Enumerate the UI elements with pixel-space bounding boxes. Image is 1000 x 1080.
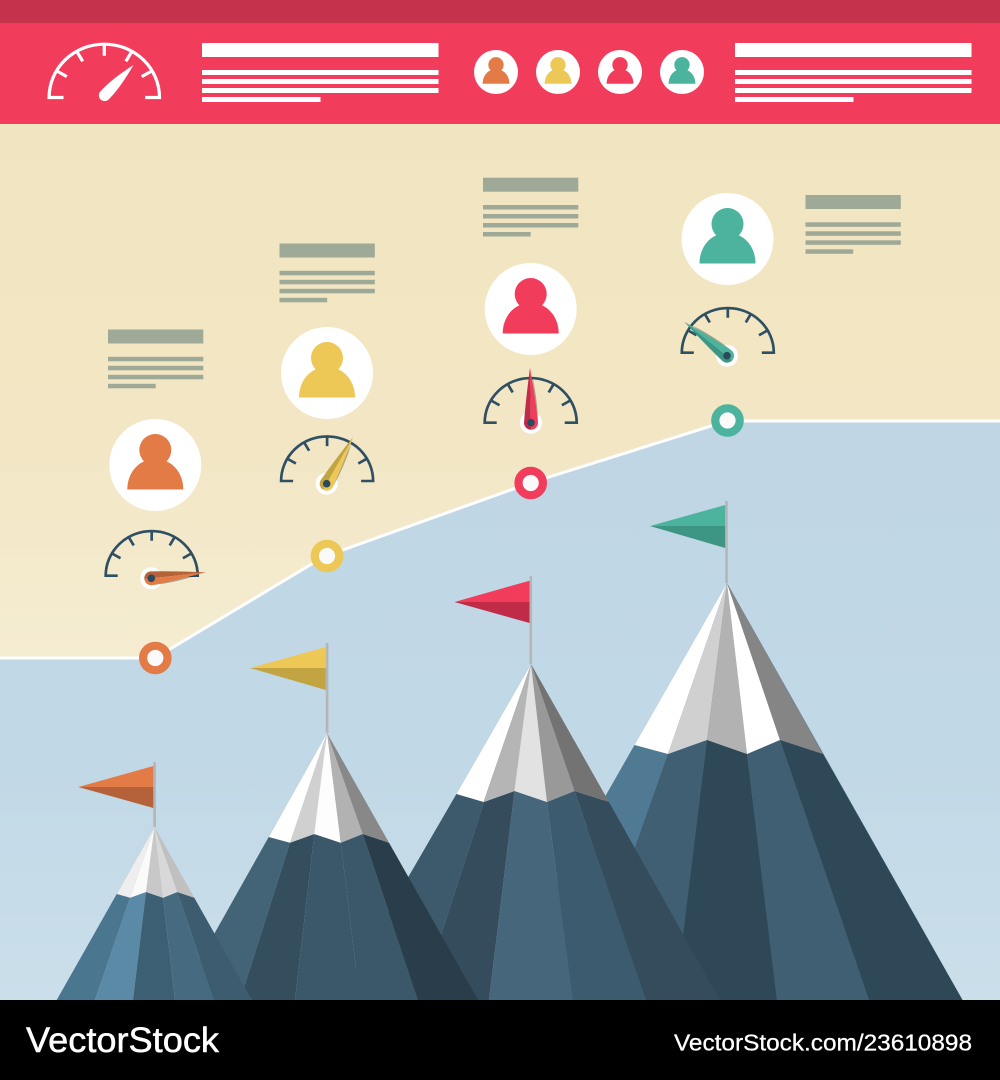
- marker: teal ring: [715, 408, 740, 433]
- marker: red ring: [518, 471, 543, 495]
- icon: small teal person: [660, 50, 704, 94]
- icon: small red person: [598, 50, 642, 94]
- marker: orange ring: [143, 646, 168, 670]
- text block: step 1: [108, 330, 203, 388]
- icon: small yellow person: [536, 50, 580, 94]
- footer bar: [0, 1000, 1000, 1080]
- footer url text: VectorStock.com/23610898: [674, 1030, 972, 1056]
- text block: step 2: [280, 244, 375, 302]
- mountain 4 with teal flag: [489, 501, 962, 1000]
- header text block: right: [735, 43, 972, 102]
- icon: red person: [485, 263, 577, 355]
- mountain 1 with orange flag: [57, 762, 252, 1000]
- header band: [0, 0, 1000, 124]
- icon: orange person: [109, 419, 201, 511]
- gauge: red, needle vertical: [485, 368, 577, 434]
- gauge: yellow, needle right of centre: [281, 433, 373, 495]
- icon: small orange person: [474, 50, 518, 94]
- header text block: left: [202, 43, 438, 102]
- marker: yellow ring: [315, 544, 339, 568]
- text block: step 3: [483, 178, 578, 236]
- footer logo text: VectorStock: [26, 1021, 220, 1060]
- icon: yellow person: [281, 327, 373, 419]
- icon: teal person: [682, 193, 774, 285]
- background: blue sky area with white curve: [0, 421, 1000, 1000]
- text block: step 4: [806, 195, 901, 254]
- mountain 3 with red flag: [337, 576, 720, 1000]
- icon: header speedometer: [49, 44, 159, 101]
- background: cream upper area: [0, 124, 1000, 664]
- gauge: teal, needle left: [680, 308, 774, 367]
- mountain 2 with yellow flag: [177, 643, 478, 1000]
- gauge: orange, needle far right: [106, 531, 207, 589]
